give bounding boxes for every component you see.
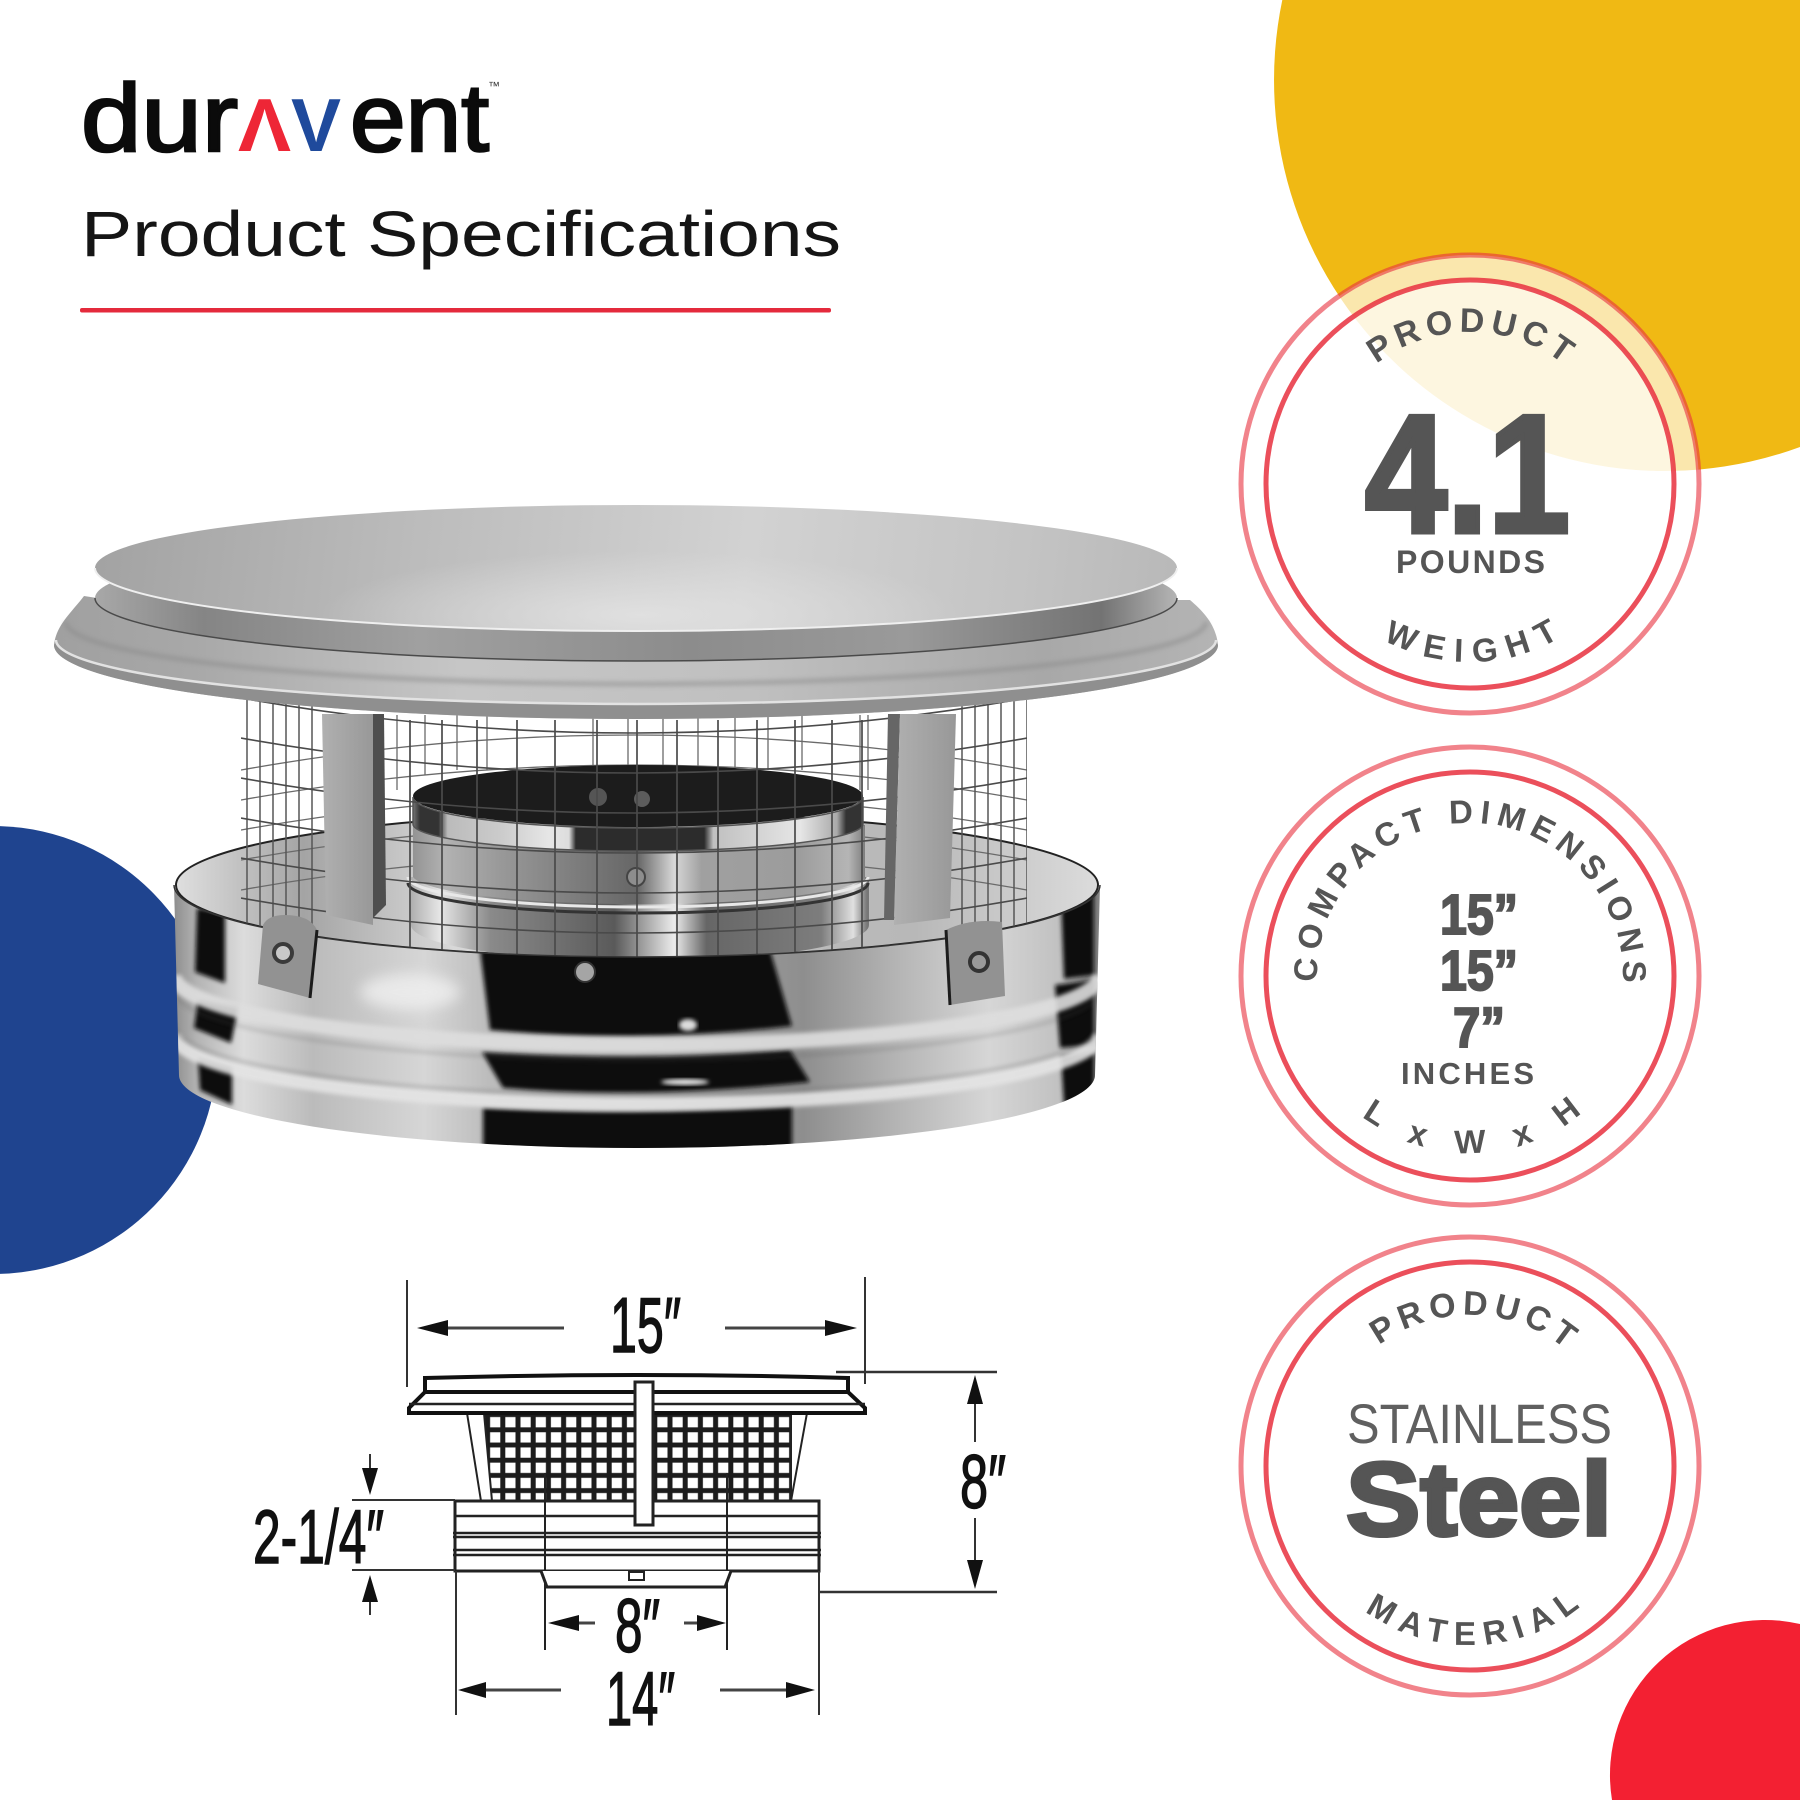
polished base body <box>174 885 1100 1160</box>
product photo: chimney cap <box>54 505 1218 1160</box>
arc label: WEIGHT: WEIGHT <box>1388 618 1553 662</box>
logo: duravent: V <box>291 83 341 167</box>
base top surface <box>176 813 1098 957</box>
dimension: 15 inch top width <box>407 1277 865 1387</box>
value: 4.1: 4.1 <box>1365 380 1570 568</box>
badge: compact dimensions <box>1238 744 1702 1208</box>
technical dimension diagram <box>253 1277 1006 1742</box>
logo: duravent: ™ <box>488 79 500 93</box>
logo: duravent: ent <box>350 65 489 172</box>
arc label: L x W x H: L x W x H <box>1363 1096 1580 1154</box>
label: STAINLESS: STAINLESS <box>1347 1392 1612 1455</box>
rivet <box>575 962 595 982</box>
inner pipe <box>408 765 869 961</box>
badge: product material <box>1238 1234 1702 1698</box>
logo: duravent: Λ <box>238 83 291 167</box>
back wires of mesh <box>241 715 1027 890</box>
dimension: 8 inch pipe: 8″ <box>615 1584 660 1669</box>
unit: INCHES: INCHES <box>1401 1056 1534 1091</box>
logo: duravent <box>81 65 500 172</box>
wire mesh screen <box>241 698 1027 960</box>
dimension: 14 inch base: 14″ <box>606 1657 675 1742</box>
dimension: 8 inch height <box>819 1372 1006 1592</box>
title underline <box>80 308 831 312</box>
dimension: 8 inch pipe <box>548 1584 726 1669</box>
values: 15 15 7: 15” <box>1440 883 1518 947</box>
lid flange <box>54 596 1218 719</box>
dimension: 2-1/4 inch collar <box>253 1454 455 1615</box>
decorative circle: red <box>1610 1620 1800 1800</box>
label: Steel: Steel <box>1346 1442 1612 1558</box>
dimension: 8 inch height: 8″ <box>960 1440 1006 1525</box>
values: 15 15 7: 15” <box>1440 939 1518 1003</box>
values: 15 15 7: 7” <box>1453 996 1505 1060</box>
dimension: 2-1/4 inch collar: 2-1/4″ <box>253 1495 384 1580</box>
arc label: COMPACT DIMENSIONS: COMPACT DIMENSIONS <box>1294 800 1646 982</box>
badge: product weight <box>1238 252 1702 716</box>
dimension: 14 inch base <box>456 1571 819 1742</box>
dimension: 15 inch top width: 15″ <box>610 1281 681 1369</box>
left bracket tab with bolt <box>258 915 317 998</box>
right bracket tab with bolt <box>946 921 1005 1005</box>
decorative circle: yellow <box>1274 0 1800 471</box>
decorative circle: blue <box>0 826 217 1274</box>
lid top disc <box>95 505 1177 661</box>
header: logo and title <box>80 65 841 312</box>
diagram cap drawing <box>409 1375 865 1650</box>
logo: duravent: dur <box>81 65 238 172</box>
arc label: PRODUCT: PRODUCT <box>1366 308 1576 362</box>
unit: POUNDS: POUNDS <box>1396 544 1545 580</box>
values: 15 15 7 <box>1440 883 1518 1060</box>
title: Product Specifications: Product Specifications <box>81 198 841 270</box>
arc label: MATERIAL: MATERIAL <box>1366 1593 1580 1645</box>
support straps <box>322 714 956 925</box>
arc label: PRODUCT: PRODUCT <box>1368 1291 1580 1344</box>
